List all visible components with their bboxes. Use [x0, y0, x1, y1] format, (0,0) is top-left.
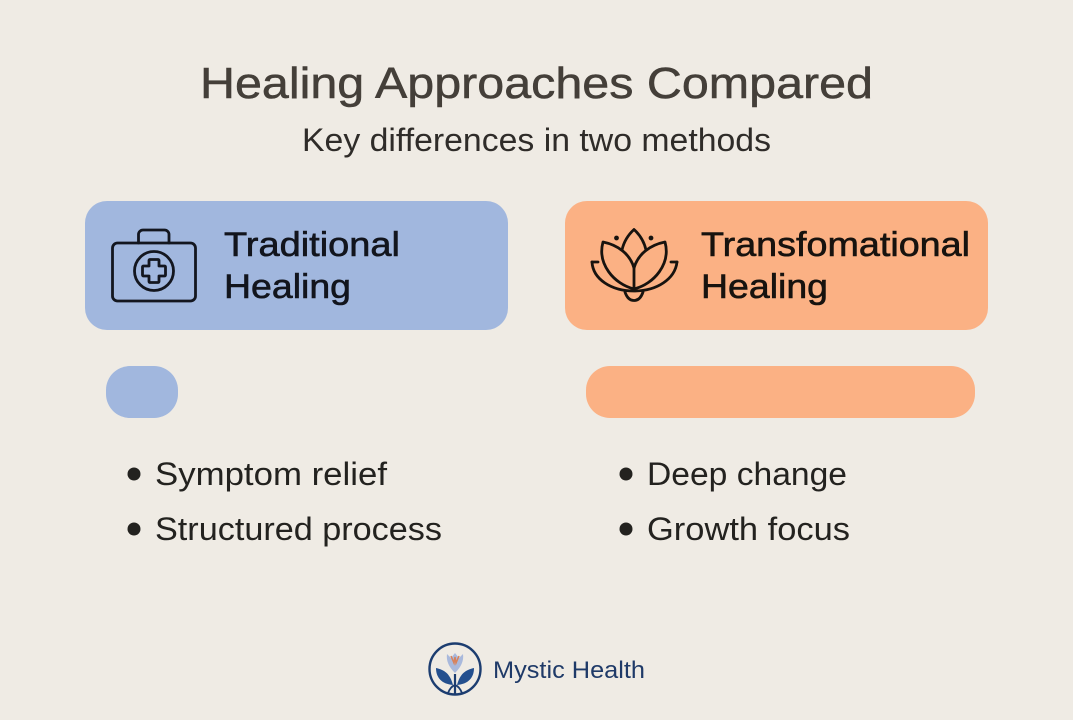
- list: traditional healing points: Structured process: [155, 511, 442, 547]
- heading: transformational healing: Transfomational: [701, 226, 970, 264]
- heading: traditional healing: Healing: [224, 268, 351, 306]
- list: transformational healing points: Growth focus: [647, 511, 850, 547]
- icon: lotus: [592, 230, 677, 300]
- blue pill: [106, 366, 178, 418]
- heading: transformational healing: [701, 226, 970, 306]
- panel: transformational healing header: [565, 201, 988, 330]
- subtitle: Key differences in two methods: [302, 122, 771, 158]
- list: transformational healing points: [620, 456, 850, 547]
- icon: lotus in circle: [430, 644, 480, 694]
- logo: mystic health: [430, 644, 645, 694]
- orange pill: [586, 366, 975, 418]
- list: transformational healing points: Deep change: [647, 456, 847, 492]
- list: traditional healing points: Symptom relief: [155, 456, 387, 492]
- heading: traditional healing: Traditional: [224, 226, 400, 264]
- panel: traditional healing header: [85, 201, 508, 330]
- brand name: Mystic Health: [493, 657, 645, 684]
- list: traditional healing points: [128, 456, 442, 547]
- icon: medical kit: [112, 230, 196, 301]
- title: Healing Approaches Compared: [200, 59, 873, 108]
- heading: transformational healing: Healing: [701, 268, 828, 306]
- heading: traditional healing: [224, 226, 400, 306]
